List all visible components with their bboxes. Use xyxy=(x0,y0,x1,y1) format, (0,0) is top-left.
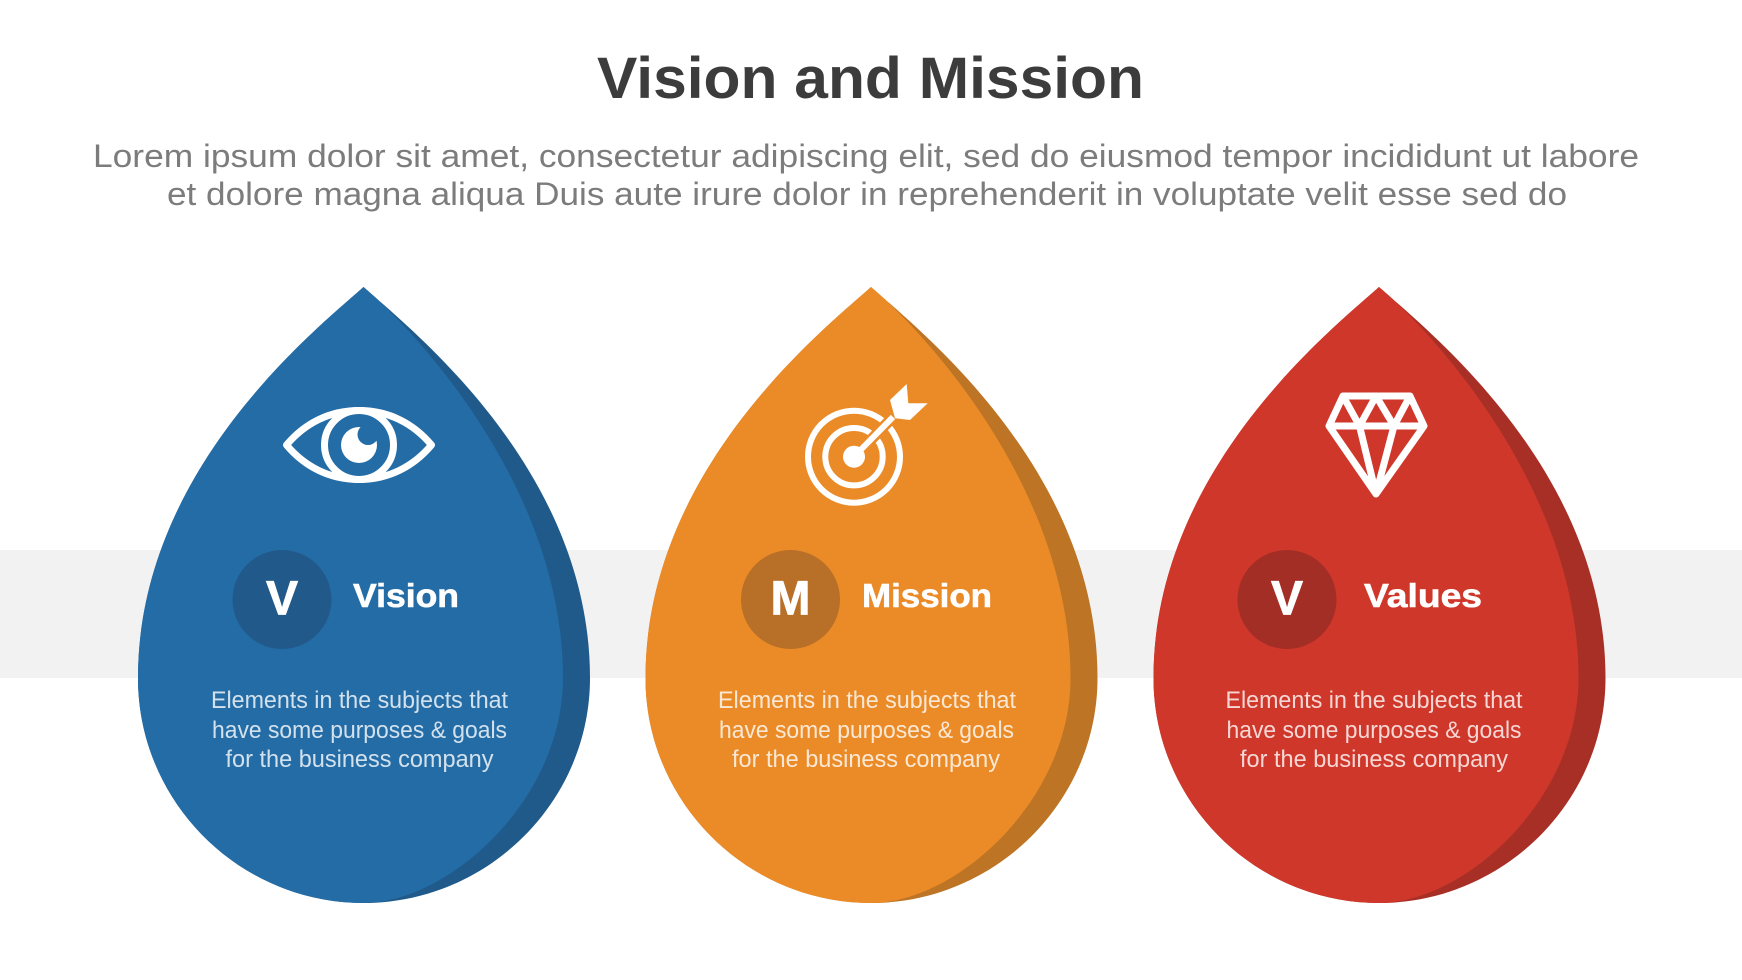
heading: Vision: Vision xyxy=(353,577,459,614)
drop shape: vision xyxy=(138,287,590,903)
description: mission xyxy=(718,687,1016,773)
heading: Values: Values xyxy=(1364,577,1482,614)
panel: values drop xyxy=(1154,287,1606,903)
letter badge: M xyxy=(741,550,840,649)
description: vision: have some purposes & goals xyxy=(212,717,507,744)
description: values: have some purposes & goals xyxy=(1226,717,1522,744)
description: values: Elements in the subjects that xyxy=(1226,687,1523,714)
description: values xyxy=(1226,687,1523,773)
letter badge: V: V xyxy=(266,572,298,626)
letter badge: V xyxy=(1238,550,1336,649)
letter badge: M: M xyxy=(771,572,810,626)
description: mission: Elements in the subjects that xyxy=(718,687,1016,714)
description: vision xyxy=(211,687,508,773)
subtitle text: et dolore magna aliqua Duis aute irure dolor in reprehenderit in voluptate velit esse sed do xyxy=(167,176,1567,212)
letter badge: V: V xyxy=(1271,572,1303,626)
letter badge: V xyxy=(232,550,332,649)
description: vision: Elements in the subjects that xyxy=(211,687,508,714)
subtitle text: Lorem ipsum dolor sit amet, consectetur adipiscing elit, sed do eiusmod tempor incididunt ut labore xyxy=(93,138,1639,174)
icon: target with arrow xyxy=(808,384,928,503)
drop shape: values xyxy=(1154,287,1606,903)
description: vision: for the business company xyxy=(226,746,494,773)
drop shape: mission xyxy=(646,287,1098,903)
horizontal background band xyxy=(0,550,1742,678)
panel: mission drop xyxy=(646,287,1098,903)
description: values: for the business company xyxy=(1240,746,1509,773)
icon: eye xyxy=(286,410,432,480)
description: mission: have some purposes & goals xyxy=(719,717,1014,744)
panel: vision drop xyxy=(138,287,590,903)
description: mission: for the business company xyxy=(732,746,1001,773)
title: Vision and Mission xyxy=(597,46,1144,111)
heading: Mission: Mission xyxy=(862,577,992,614)
subtitle text xyxy=(93,138,1639,212)
icon: diamond xyxy=(1329,396,1424,494)
